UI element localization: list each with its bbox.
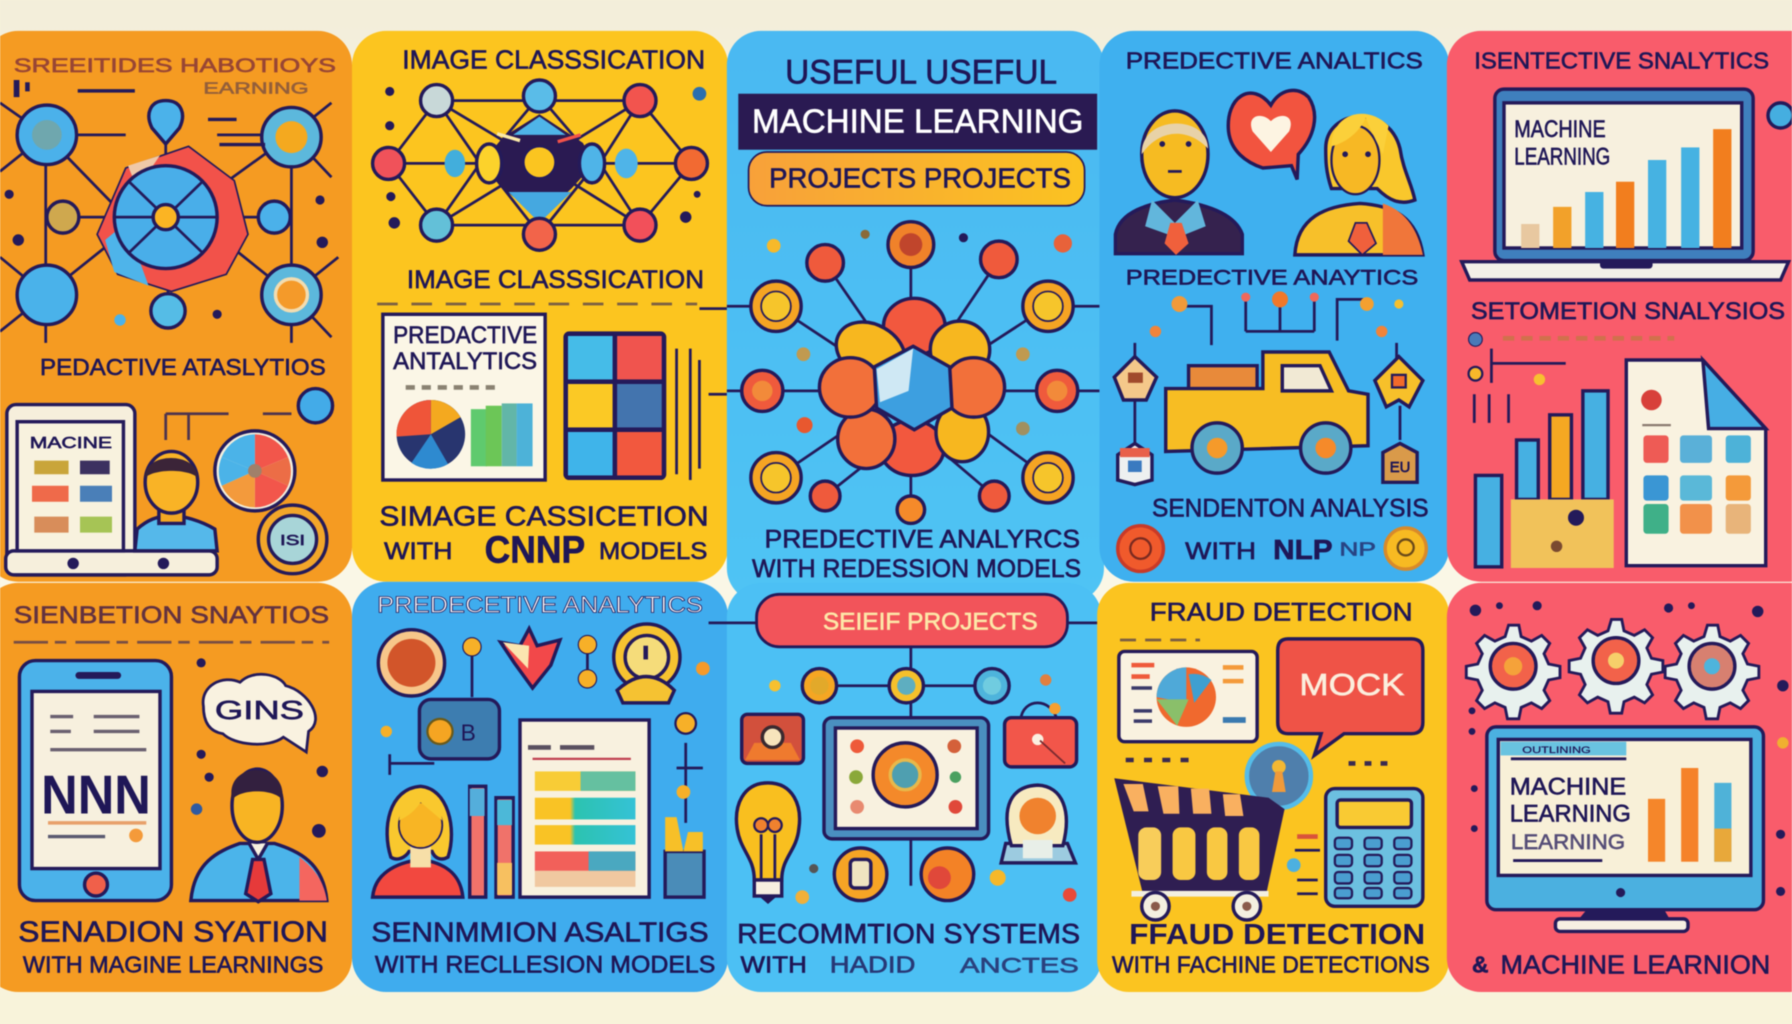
icon: yellow button bbox=[1385, 528, 1426, 569]
heading: analytics: ISENTECTIVE SNALYTICS bbox=[1474, 48, 1769, 74]
caption: with cnn models: MODELS bbox=[599, 538, 707, 565]
heading: image classification caption: SIMAGE CASSICETION bbox=[379, 501, 709, 532]
icon: speech bubble bbox=[203, 674, 316, 752]
icon: laptop with bars: MACHINE bbox=[1514, 116, 1606, 143]
icon: tablet with person base: MACINE bbox=[30, 435, 112, 452]
caption: with cnn models: WITH bbox=[384, 538, 453, 565]
pill: projects: SEIEIF PROJECTS bbox=[823, 609, 1038, 636]
caption: with regression models: WITH RECLLESION MODELS bbox=[375, 952, 715, 979]
icon: gears bbox=[1466, 619, 1759, 719]
icon: circle badge right bbox=[921, 848, 974, 901]
icon: yellow badge bbox=[614, 624, 680, 703]
icon: keyhole badge bbox=[1247, 744, 1311, 808]
icon: circle badge left bbox=[834, 848, 887, 901]
diagram: radial flower network bbox=[727, 222, 1177, 523]
marks bbox=[1126, 760, 1394, 894]
callout: mock speech bubble bbox=[1278, 639, 1423, 755]
icon: tablet with person base bbox=[6, 405, 217, 575]
caption: predictive analytics with regression models: WITH REDESSION MODELS bbox=[752, 555, 1081, 583]
caption: with hybrid approaches: ANCTES bbox=[960, 953, 1079, 978]
icon: lower right tag: EU bbox=[1390, 460, 1410, 476]
icon: calculator bbox=[1326, 789, 1423, 906]
banner: machine learning: MACHINE LEARNING bbox=[752, 104, 1083, 141]
chart: vertical bars bbox=[470, 786, 513, 897]
panel: sky blue central title bbox=[727, 31, 1177, 602]
icon: blue dot bbox=[298, 389, 333, 423]
caption: with hybrid approaches bbox=[741, 952, 1079, 978]
icon: heart speech bubble bbox=[1228, 90, 1315, 179]
icon: light bulb bbox=[736, 783, 800, 904]
caption: fraud detection: FFAUD DETECTION bbox=[1129, 919, 1425, 951]
heading: predictive analytics: PEDACTIVE ATASLYTIOS bbox=[40, 354, 326, 380]
caption: with hybrid approaches: WITH bbox=[741, 952, 807, 978]
heading: fraud detection: FRAUD DETECTION bbox=[1150, 599, 1413, 627]
icons: drops bbox=[381, 635, 710, 737]
caption: with nlp: WITH bbox=[1185, 538, 1256, 565]
main title block bbox=[738, 53, 1097, 206]
caption: faded learning: EARNING bbox=[203, 81, 309, 98]
icon: bag bbox=[1005, 703, 1077, 767]
icon: device bbox=[389, 699, 499, 775]
icon: small symbol: & bbox=[1472, 952, 1488, 978]
heading: predictive analytics top: PREDECTIVE ANALTICS bbox=[1126, 48, 1423, 74]
caption: with machine learnings: WITH MAGINE LEARNINGS bbox=[23, 952, 323, 978]
icon: woman bbox=[1295, 114, 1423, 255]
icon: central screen bbox=[824, 718, 989, 839]
card: predictive analytics report: ANTALYTICS bbox=[393, 348, 537, 375]
marks bbox=[1469, 601, 1789, 896]
icon: monitor with chart: MACHINE bbox=[1510, 773, 1626, 800]
icon: businessman bbox=[191, 769, 327, 902]
icon: speech bubble: GINS bbox=[215, 695, 304, 725]
caption: with nlp: NLP bbox=[1273, 534, 1333, 565]
caption: with machine detections: WITH FACHINE DETECTIONS bbox=[1112, 952, 1430, 978]
icon: truck bbox=[1166, 352, 1368, 473]
icon: camera tile bbox=[742, 714, 803, 763]
callout: mock speech bubble: MOCK bbox=[1299, 667, 1405, 702]
caption: recommendation systems: RECOMMTION SYSTEMS bbox=[737, 918, 1080, 949]
icon: clipped items right bbox=[665, 713, 704, 897]
icon: man bbox=[1115, 111, 1242, 255]
icon: star tag bbox=[1375, 357, 1423, 407]
icon: phone bbox=[19, 661, 171, 901]
icon: lower right tag bbox=[1383, 443, 1417, 482]
icon: woman bbox=[373, 786, 463, 897]
marks bbox=[795, 703, 1077, 904]
caption: sentiment analysis: SENDENTON ANALYSIS bbox=[1152, 495, 1429, 523]
caption: with nlp bbox=[1185, 534, 1376, 565]
icon: person badge bbox=[1001, 785, 1075, 863]
panel: red gears and monitor bbox=[1447, 583, 1792, 992]
icon: document with grid bbox=[1626, 360, 1766, 566]
icon: report document bbox=[520, 720, 649, 897]
panel: orange neural network bbox=[0, 31, 352, 582]
icon: laptop with bars: LEARNING bbox=[1514, 144, 1610, 171]
heading: image classification top: IMAGE CLASSSICATION bbox=[402, 45, 705, 75]
icon: globe dot bbox=[1768, 103, 1792, 128]
connectors and dots bbox=[1135, 291, 1403, 446]
icon: diamond tag bbox=[1114, 357, 1157, 400]
icon: device: B bbox=[461, 720, 476, 746]
caption: predictive analytics with regression models bbox=[752, 525, 1081, 583]
caption: sentiment analysis: SENADION SYATION bbox=[18, 917, 328, 949]
icon: laptop with bars bbox=[1462, 89, 1789, 280]
banner: machine learning bbox=[738, 94, 1097, 150]
card: report with pie bbox=[1119, 651, 1257, 742]
caption: sentiment analytics: SENNMMION ASALTIGS bbox=[371, 917, 709, 948]
panel: yellow image classification bbox=[352, 31, 731, 582]
caption: predictive analytics with regression models: PREDECTIVE ANALYRCS bbox=[765, 525, 1080, 553]
pill: projects bbox=[757, 594, 1067, 647]
icon: monitor with chart: LEARNING bbox=[1510, 801, 1631, 828]
caption: with hybrid approaches: HADID bbox=[830, 952, 915, 978]
caption: with cnn models: CNNP bbox=[485, 528, 585, 570]
heading: predictive analytics: PREDECETIVE ANALYTICS bbox=[377, 592, 703, 618]
icon: red-brown badge bbox=[378, 630, 445, 696]
icon: shopping cart bbox=[1114, 778, 1285, 920]
marks near person bbox=[191, 658, 328, 838]
icon: red button bbox=[1118, 526, 1163, 571]
heading: predictive analytics middle: PREDECTIVE ANAYTICS bbox=[1126, 265, 1418, 290]
icon: monitor with chart bbox=[1487, 727, 1763, 931]
panel: orange phone sentiment bbox=[0, 583, 352, 992]
icon: phone: NNN bbox=[41, 764, 151, 826]
card: predictive analytics report bbox=[383, 314, 545, 480]
panel: sky blue recommendation bbox=[709, 583, 1120, 992]
nodes row bbox=[769, 669, 1051, 703]
pill: projects: PROJECTS PROJECTS bbox=[769, 162, 1071, 193]
chart: colour grid bbox=[563, 331, 666, 480]
icon: person bbox=[135, 451, 217, 551]
caption: with nlp: NP bbox=[1339, 538, 1376, 559]
heading: sentiment analysis: SIENBETION SNAYTIOS bbox=[14, 602, 329, 629]
icon: circular badge: ISI bbox=[280, 533, 305, 549]
panel: yellow fraud detection bbox=[1097, 583, 1449, 992]
network diagram bbox=[0, 80, 338, 343]
heading: image classification middle: IMAGE CLASSSICATION bbox=[407, 266, 704, 294]
heading: useful useful: USEFUL USEFUL bbox=[785, 53, 1057, 91]
panel: blue analytics icons bbox=[352, 582, 728, 992]
heading: segmentation analysis: SETOMETION SNALYSIOS bbox=[1471, 298, 1785, 325]
network diagram bbox=[373, 80, 707, 250]
chart: bars with box bbox=[1469, 333, 1674, 568]
caption: with cnn models bbox=[384, 528, 707, 570]
card: predictive analytics report: PREDACTIVE bbox=[393, 322, 537, 349]
icon: monitor with chart: OUTLINING bbox=[1522, 745, 1591, 755]
panel: red laptop and document bbox=[1447, 31, 1792, 582]
icon: circular badge bbox=[258, 505, 327, 574]
icon: segmented wheel bbox=[215, 431, 295, 511]
icon: star bbox=[501, 629, 560, 688]
caption: machine learning: MACHINE LEARNION bbox=[1501, 950, 1770, 980]
icon: lower left tag bbox=[1118, 443, 1152, 485]
pill: projects bbox=[749, 152, 1085, 206]
icon: monitor with chart: LEARNING bbox=[1511, 829, 1625, 854]
heading: top orange title: SREEITIDES HABOTIOYS bbox=[14, 55, 336, 77]
panel: blue predictive analytics people and truck bbox=[1099, 31, 1449, 582]
